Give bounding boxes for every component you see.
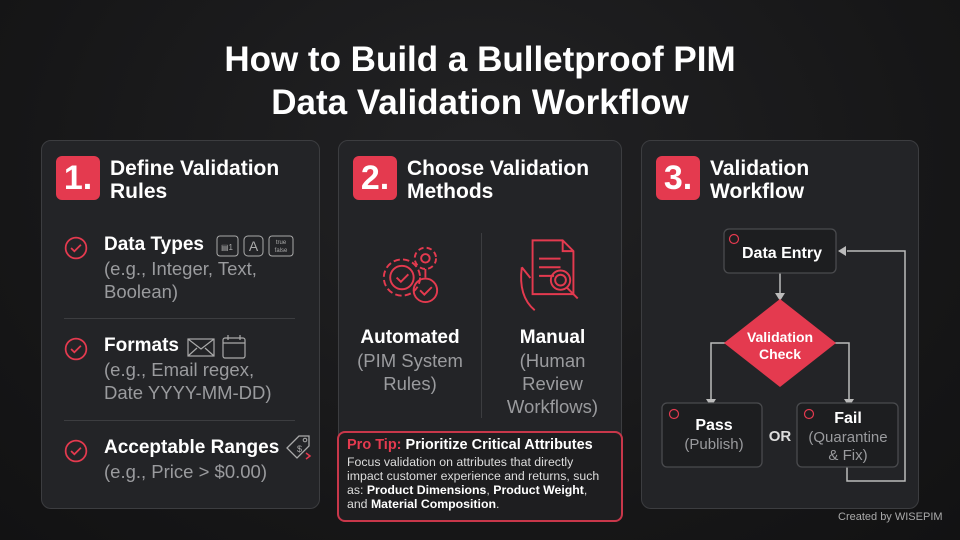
fail box: & Fix)	[828, 447, 868, 464]
item: acceptable ranges: $	[297, 444, 302, 454]
item: acceptable ranges: Acceptable Ranges	[104, 437, 279, 458]
callout: pro tip: as: Product Dimensions, Product Weight,	[347, 483, 587, 497]
heading 1: Define Validation	[110, 157, 279, 180]
badge 3: 3.	[664, 159, 692, 197]
manual label: (Human	[520, 350, 585, 371]
automated label: Rules)	[383, 373, 437, 394]
panel: validation workflow	[641, 140, 919, 509]
heading 2: Choose Validation	[407, 157, 589, 180]
item: data types: true	[276, 240, 287, 246]
diamond	[724, 299, 836, 387]
item: acceptable ranges	[64, 435, 312, 482]
automated label: Automated	[360, 327, 460, 348]
automated label	[357, 327, 463, 394]
badge 2: 2.	[361, 159, 389, 197]
automated label: (PIM System	[357, 350, 463, 371]
heading 1	[110, 157, 279, 203]
item: formats: Formats	[104, 335, 179, 356]
item: data types: Boolean)	[104, 281, 178, 302]
item: formats: Date YYYY-MM-DD)	[104, 382, 272, 403]
panel: choose validation methods	[338, 140, 622, 509]
heading 3: Validation	[710, 157, 809, 180]
item: acceptable ranges: (e.g., Price > $0.00)	[104, 461, 267, 482]
fail box: Fail	[834, 410, 862, 427]
icon: gears	[382, 246, 438, 303]
item: data types: ▤1	[221, 243, 234, 252]
item: data types: A	[249, 238, 259, 254]
badge 3	[656, 156, 700, 200]
manual label	[507, 327, 598, 417]
item: formats	[64, 335, 272, 403]
data entry box: Data Entry	[742, 245, 822, 262]
item: data types: false	[275, 248, 288, 254]
pass box: (Publish)	[684, 436, 744, 453]
item: data types: Data Types	[104, 234, 204, 255]
OR: OR	[769, 428, 791, 445]
title: Data Validation Workflow	[271, 83, 689, 122]
callout: pro tip: impact customer experience and returns, such	[347, 469, 599, 483]
pass box	[662, 403, 762, 467]
callout: pro tip: and Material Composition.	[347, 497, 499, 511]
title	[224, 40, 736, 122]
heading 2	[407, 157, 589, 203]
manual label: Review	[522, 373, 583, 394]
callout: pro tip: Pro Tip: Prioritize Critical Attributes	[347, 437, 593, 453]
fail box: (Quarantine	[808, 429, 888, 446]
callout: pro tip	[337, 431, 623, 522]
data entry box	[724, 229, 836, 273]
pass box: Pass	[695, 417, 733, 434]
icon: document review	[520, 239, 578, 311]
heading 3	[710, 157, 809, 203]
manual label: Manual	[520, 327, 585, 348]
diamond: Validation	[747, 329, 813, 345]
diamond: Check	[759, 346, 801, 362]
fail box	[797, 403, 898, 467]
badge 1: 1.	[64, 159, 92, 197]
footer credit: Created by WISEPIM	[838, 511, 943, 523]
heading 3: Workflow	[710, 180, 804, 203]
callout: pro tip: Focus validation on attributes that directly	[347, 455, 573, 469]
badge 2	[353, 156, 397, 200]
flowchart	[661, 228, 906, 482]
item: formats: (e.g., Email regex,	[104, 359, 254, 380]
panel: define validation rules	[41, 140, 320, 509]
heading 2: Methods	[407, 180, 493, 203]
item: data types	[64, 234, 294, 302]
badge 1	[56, 156, 100, 200]
item: data types: (e.g., Integer, Text,	[104, 258, 257, 279]
manual label: Workflows)	[507, 396, 598, 417]
heading 1: Rules	[110, 180, 167, 203]
title: How to Build a Bulletproof PIM	[224, 40, 736, 79]
